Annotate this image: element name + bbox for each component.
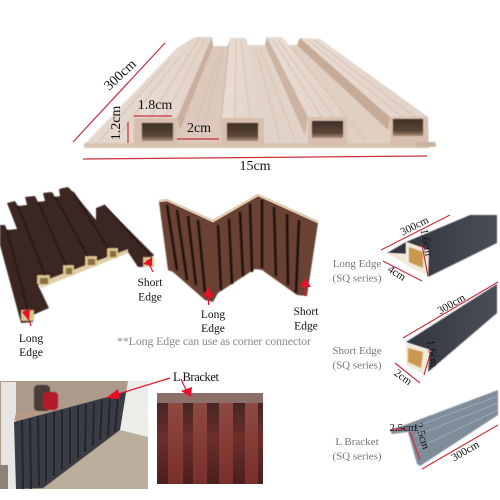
short edge dimension text: 2cm [392, 367, 414, 388]
arrow: corner long edge [203, 287, 214, 305]
L bracket dimension text: 300cm [450, 439, 482, 464]
dimension labels: 300cm [102, 57, 140, 94]
label: corner short edge: Short [294, 306, 318, 318]
arrow: to bracket strip [181, 379, 192, 397]
note: corner connector: **Long Edge can use as corner connector [117, 334, 311, 348]
label: corner long edge: Edge [201, 323, 225, 335]
short edge profile body [406, 284, 497, 372]
L bracket dimension text: 2.5cm [389, 422, 417, 434]
light slats [168, 403, 258, 484]
panel: SQ series short edge [332, 282, 498, 388]
panel: dark brown panel with long and short edge [0, 187, 163, 359]
label: L bracket SQ series: (SQ series) [332, 450, 382, 462]
short edge dimension text [392, 292, 468, 388]
dark vertical grooves [167, 200, 299, 293]
label: long edge SQ series: Long Edge [333, 258, 381, 270]
long edge hollow [409, 247, 423, 268]
L bracket dimension lines [392, 425, 498, 469]
corner panel shape [159, 195, 318, 302]
long edge dimension text: 1.6cm [418, 228, 434, 257]
photo: installed wall panel in room [0, 378, 170, 489]
long edge dimension lines [381, 215, 450, 281]
arrow: long edge [22, 308, 31, 326]
dark brown panel shape [0, 187, 154, 323]
panel: SQ series long edge [332, 214, 497, 284]
long edge profile body [406, 215, 497, 277]
short edge dimension text: 300cm [436, 292, 468, 317]
short edge hollow [408, 348, 423, 368]
panel: corner-mounted brown panel [159, 195, 319, 335]
label: short edge: Edge [138, 292, 162, 304]
short edge dimension text: 1.6cm [424, 339, 440, 368]
long edge dark flange [387, 242, 406, 254]
label: short edge SQ series: (SQ series) [332, 360, 382, 372]
label: corner long edge: Long [201, 309, 225, 321]
arrow: short edge [143, 257, 153, 272]
short edge cream end [406, 343, 430, 375]
long edge cream flange [387, 253, 406, 264]
dimension labels: 2cm [187, 121, 211, 136]
cream top edge [159, 195, 318, 222]
red dimension lines [73, 43, 427, 159]
photo: L bracket close-up [157, 379, 263, 484]
floor [43, 430, 148, 489]
short edge dimension lines [395, 282, 498, 383]
low shelf area [14, 409, 56, 421]
label: long edge: Edge [19, 347, 43, 359]
L bracket body [390, 390, 498, 466]
label: L bracket SQ series: L Bracket [335, 436, 379, 448]
L bracket dimension text [389, 421, 482, 464]
right white wall [120, 381, 148, 437]
label: long edge: Long [19, 333, 43, 345]
rib shading [7, 192, 150, 310]
long edge dimension text: 300cm [399, 214, 431, 238]
label: short edge: Short [138, 277, 162, 289]
cream base edge [38, 249, 128, 288]
panel: main beige wall panel with dimensions [73, 37, 436, 174]
L bracket dimension text: 2.5cm [412, 421, 432, 451]
long edge dimension text: 4cm [385, 263, 408, 284]
label: corner short edge: Edge [294, 320, 318, 332]
arrow: to L bracket on wall [106, 378, 170, 399]
dark slatted wall panelling [14, 392, 126, 489]
panel body [84, 37, 436, 148]
dimension labels: 1.2cm [109, 106, 124, 140]
cream profile ends [21, 248, 154, 321]
long edge cream end [406, 242, 429, 276]
left white column [1, 382, 16, 489]
top bracket strip [157, 393, 263, 403]
dimension labels: 15cm [239, 159, 271, 174]
label: long edge SQ series: (SQ series) [332, 272, 382, 284]
dimension labels [102, 57, 271, 174]
L bracket grooves [412, 396, 498, 448]
label: L bracket: L Bracket [173, 370, 220, 384]
panel: SQ series L bracket [332, 390, 498, 469]
arrow: corner short edge [300, 278, 311, 296]
red bag [34, 385, 58, 411]
label: short edge SQ series: Short Edge [332, 345, 382, 357]
dimension labels: 1.8cm [138, 98, 172, 113]
room wall [0, 381, 148, 489]
close-up background [157, 393, 263, 484]
long edge dimension text [385, 214, 434, 284]
